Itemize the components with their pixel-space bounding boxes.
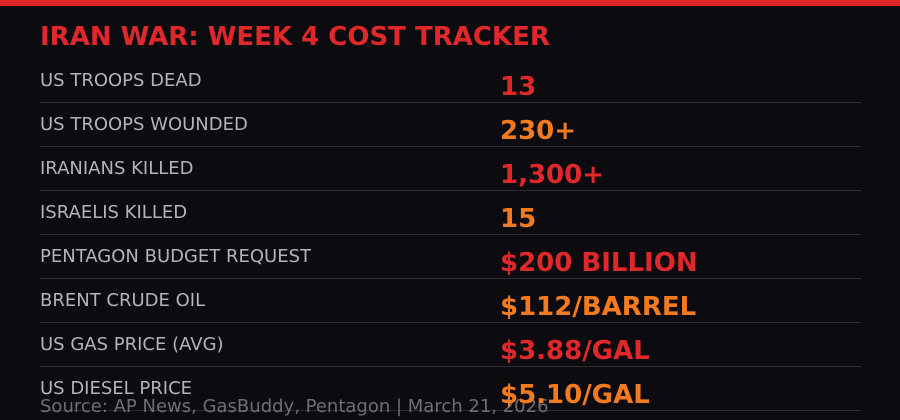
row labels	[40, 70, 312, 399]
row labels: PENTAGON BUDGET REQUEST	[40, 246, 312, 267]
source note: Source: AP News, GasBuddy, Pentagon | March 21, 2026	[40, 396, 549, 417]
row labels: ISRAELIS KILLED	[40, 202, 187, 223]
row labels: BRENT CRUDE OIL	[40, 290, 205, 311]
row values: 15	[500, 204, 536, 234]
row values: 230+	[500, 116, 576, 146]
row values: $112/BARREL	[500, 292, 696, 322]
row values: $5.10/GAL	[500, 380, 650, 410]
tracker table	[40, 70, 698, 410]
row values: 13	[500, 72, 536, 102]
row labels: IRANIANS KILLED	[40, 158, 194, 179]
row labels: US TROOPS DEAD	[40, 70, 202, 91]
row labels: US TROOPS WOUNDED	[40, 114, 248, 135]
top accent bar	[0, 0, 900, 6]
row values: $3.88/GAL	[500, 336, 650, 366]
row values	[500, 72, 698, 410]
row values: $200 BILLION	[500, 248, 698, 278]
row values: 1,300+	[500, 160, 604, 190]
row labels: US DIESEL PRICE	[40, 378, 192, 399]
title: IRAN WAR: WEEK 4 COST TRACKER	[40, 22, 550, 52]
row labels: US GAS PRICE (AVG)	[40, 334, 224, 355]
